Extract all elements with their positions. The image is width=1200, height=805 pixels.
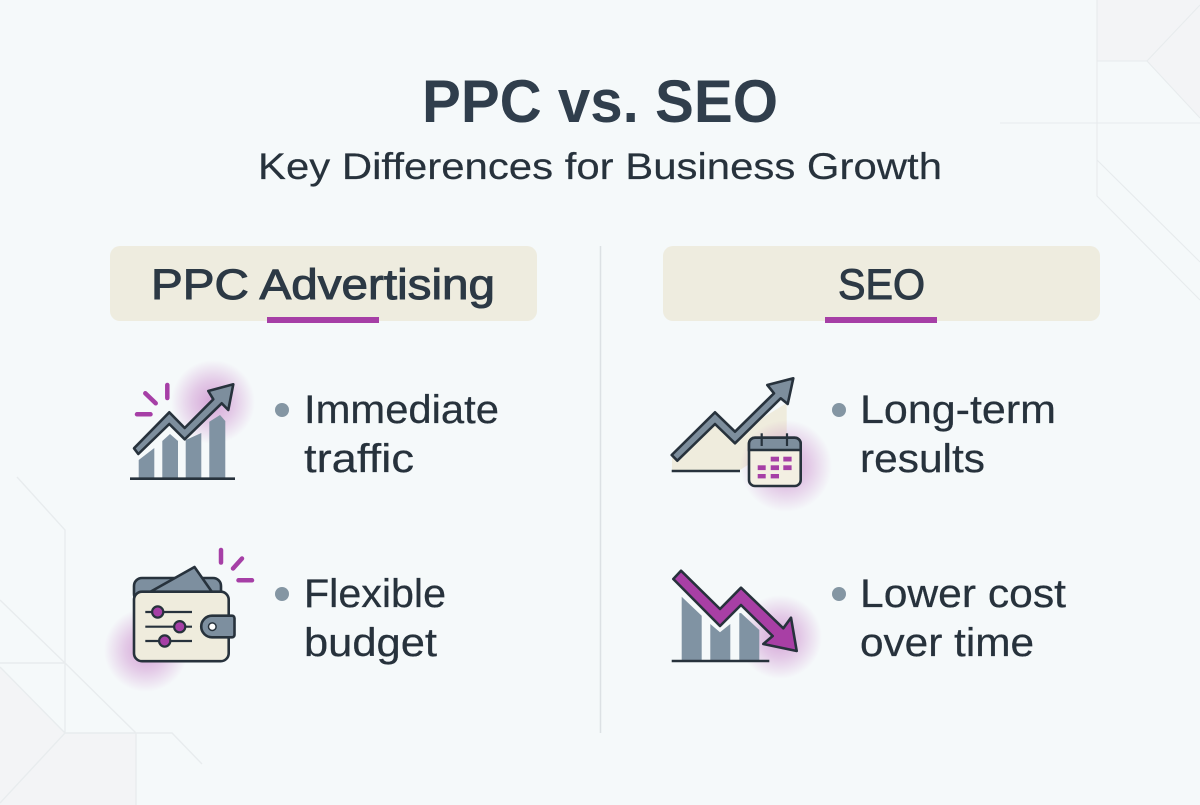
icon: rising bar chart with arrow [130, 360, 255, 479]
heading: PPC Advertising [110, 246, 537, 323]
text: Lower cost over time [832, 572, 1066, 665]
panel: SEO column [663, 246, 1100, 679]
background geometric pattern: bottom left [0, 477, 202, 805]
text: Immediate traffic: traffic [304, 437, 414, 481]
text: Lower cost over time: Lower cost [860, 572, 1066, 616]
text: Flexible budget: Flexible [304, 572, 446, 616]
subtitle: Key Differences for Business Growth [258, 146, 942, 187]
panel: PPC Advertising column [104, 246, 537, 692]
text: Flexible budget [275, 572, 446, 665]
icon: wallet with sliders [104, 550, 252, 692]
text: Long-term results [832, 388, 1056, 481]
icon: growth line with calendar [672, 378, 832, 512]
text: Long-term results: results [860, 437, 985, 481]
text: Lower cost over time: over time [860, 621, 1034, 665]
heading: SEO [663, 246, 1100, 323]
text: Long-term results: Long-term [860, 388, 1056, 432]
column divider [600, 246, 602, 733]
background geometric pattern: top right [1000, 0, 1200, 300]
title: PPC vs. SEO [422, 68, 778, 135]
heading: PPC Advertising: PPC Advertising [151, 261, 495, 309]
heading: SEO: SEO [838, 261, 925, 309]
text: Flexible budget: budget [304, 621, 437, 665]
text: Immediate traffic: Immediate [304, 388, 499, 432]
icon: falling bars with downward arrow [672, 571, 822, 679]
text: Immediate traffic [275, 388, 499, 481]
